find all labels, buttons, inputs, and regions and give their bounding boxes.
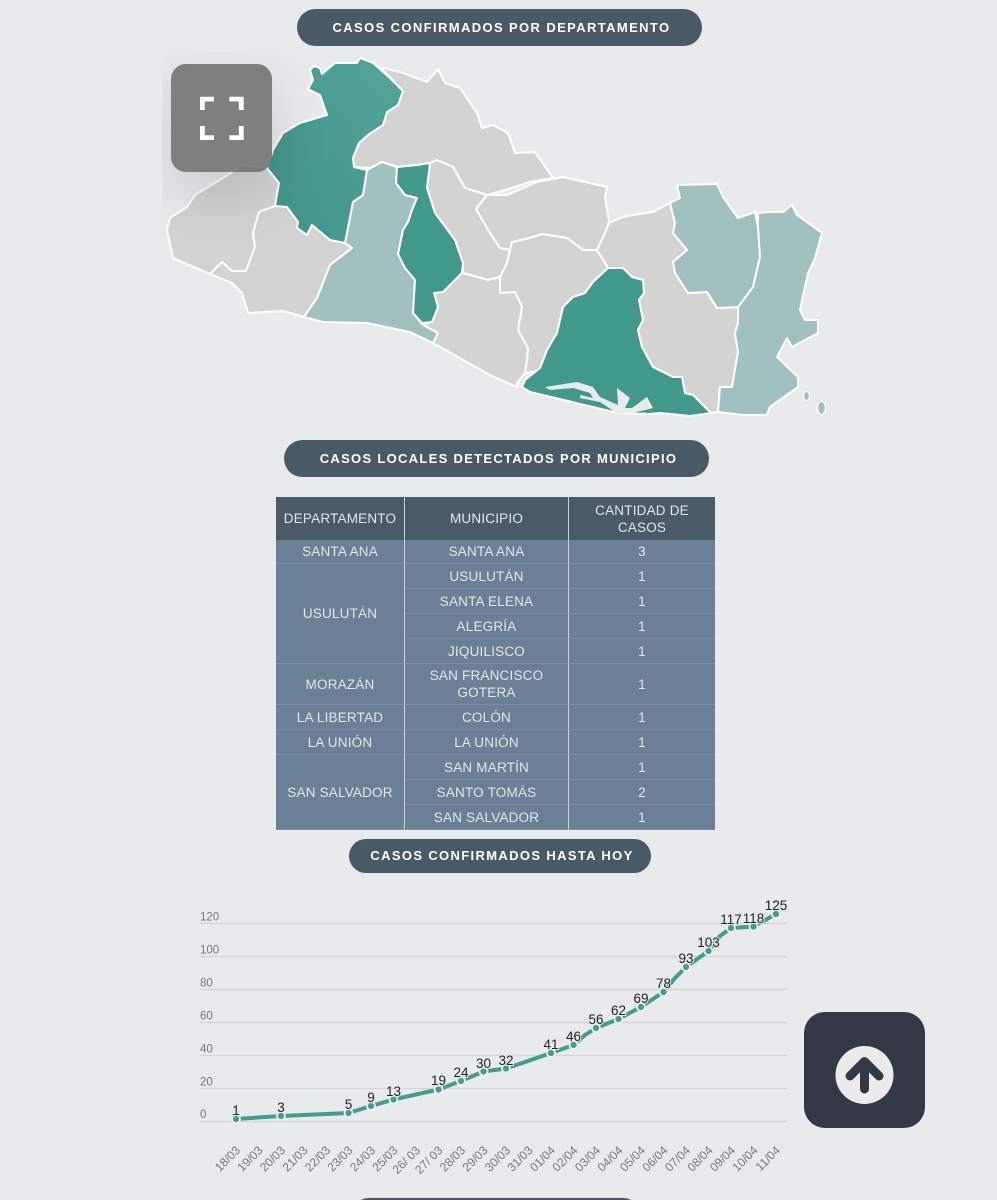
- line chart: casos acumulados: [200, 898, 787, 1177]
- table: casos por municipio: MORAZÁN: [306, 676, 374, 692]
- y axis labels: 40: [200, 1044, 213, 1056]
- x axis labels: 24/03: [347, 1143, 378, 1174]
- y axis labels: 0: [200, 1109, 206, 1121]
- table: casos por municipio: ALEGRÍA: [457, 618, 516, 634]
- table: casos por municipio: 1: [638, 644, 646, 658]
- x axis labels: 10/04: [729, 1143, 761, 1174]
- x axis labels: 08/04: [684, 1143, 716, 1174]
- department: Santa Ana: [267, 58, 403, 243]
- data labels: 118: [743, 911, 764, 926]
- data labels: 93: [678, 951, 694, 966]
- x axis labels: 27/ 03: [412, 1143, 446, 1177]
- fullscreen button with shadow: [162, 64, 290, 210]
- data labels: 69: [633, 991, 649, 1006]
- department: San Vicente: [500, 234, 608, 387]
- data labels: 125: [765, 898, 787, 913]
- x axis labels: 26/ 03: [390, 1143, 423, 1177]
- data labels: 30: [476, 1056, 491, 1071]
- department: La Libertad: [304, 162, 438, 343]
- table: casos por municipio: 2: [638, 784, 646, 800]
- x axis labels: 22/03: [302, 1143, 333, 1174]
- data labels: 46: [566, 1029, 581, 1044]
- table: casos por municipio: LA UNIÓN: [454, 734, 519, 750]
- y axis labels: 100: [200, 944, 219, 956]
- heading: casos confirmados por departamento: [297, 9, 702, 46]
- x axis labels: 09/04: [707, 1143, 738, 1174]
- table: casos por municipio: DEPARTAMENTO: [284, 511, 396, 526]
- department: Morazan: [670, 184, 760, 308]
- data labels: 3: [277, 1100, 285, 1115]
- table: casos por municipio: 1: [638, 710, 646, 724]
- table: casos por municipio: LA UNIÓN: [308, 734, 372, 750]
- x axis labels: 07/04: [662, 1143, 693, 1174]
- table: casos por municipio: 1: [638, 568, 646, 584]
- x axis labels: 29/03: [459, 1143, 491, 1174]
- department: La Union: [718, 205, 822, 415]
- data labels: 117: [720, 912, 742, 927]
- table: casos por municipio: 1: [638, 734, 646, 750]
- table: casos por municipio: USULUTÁN: [303, 606, 377, 621]
- department: Usulutan: [522, 268, 711, 416]
- data labels: 41: [543, 1037, 559, 1052]
- islands: [804, 392, 826, 414]
- data labels: 103: [697, 935, 720, 950]
- x axis labels: 18/03: [212, 1143, 243, 1174]
- table: casos por municipio: GOTERA: [457, 685, 516, 700]
- data labels: 13: [386, 1084, 401, 1099]
- table: casos por municipio: USULUTÁN: [449, 568, 524, 584]
- department: Sonsonate: [210, 206, 352, 317]
- department: San Miguel: [597, 203, 738, 413]
- table: casos por municipio: 1: [638, 810, 646, 824]
- x axis labels: 05/04: [617, 1143, 648, 1174]
- table: casos por municipio: 1: [638, 676, 646, 692]
- data labels: 9: [367, 1090, 375, 1105]
- table: casos por municipio: CASOS: [618, 520, 666, 534]
- data points: [232, 910, 780, 1123]
- x axis labels: 25/03: [369, 1143, 401, 1174]
- data labels: 56: [588, 1012, 604, 1027]
- department: Chalatenango: [353, 67, 553, 195]
- icon: up arrow in circle: [836, 1046, 894, 1104]
- department: Ahuachapan: [167, 165, 279, 274]
- table: casos por municipio: 1: [638, 760, 646, 774]
- table: casos por municipio: SAN FRANCISCO: [430, 668, 543, 683]
- data labels: 78: [656, 976, 671, 991]
- x axis labels: 28/03: [437, 1143, 468, 1174]
- x axis labels: 02/04: [549, 1143, 581, 1174]
- x axis labels: 11/04: [753, 1143, 783, 1174]
- y axis labels: 120: [200, 912, 219, 924]
- table: casos por municipio: MUNICIPIO: [450, 511, 523, 526]
- table: casos por municipio: CANTIDAD DE: [595, 502, 689, 518]
- x axis labels: 23/03: [324, 1143, 356, 1174]
- table: casos por municipio: SAN MARTÍN: [444, 760, 529, 774]
- department: Cuscatlan: [427, 160, 510, 280]
- table: casos por municipio: SANTA ANA: [302, 544, 378, 559]
- heading: casos locales detectados por municipio: CASOS LOCALES DETECTADOS POR MUNICIPIO: [320, 451, 677, 466]
- heading: casos confirmados hasta hoy: CASOS CONFIRMADOS HASTA HOY: [370, 848, 634, 863]
- table: casos por municipio: COLÓN: [462, 710, 511, 724]
- table: casos por municipio: SAN SALVADOR: [434, 810, 539, 824]
- table: casos por municipio: 1: [638, 618, 646, 634]
- heading: casos confirmados hasta hoy: [349, 839, 651, 873]
- back to top button: [804, 1012, 925, 1128]
- data labels: 62: [611, 1003, 626, 1018]
- table: casos por municipio: JIQUILISCO: [448, 644, 525, 658]
- table: casos por municipio: SANTA ELENA: [440, 594, 533, 608]
- x axis labels: 01/04: [527, 1143, 558, 1174]
- data labels: 32: [498, 1053, 514, 1068]
- table: casos por municipio: LA LIBERTAD: [297, 710, 383, 724]
- x axis labels: 31/03: [504, 1143, 536, 1174]
- x axis labels: 03/04: [572, 1143, 603, 1174]
- table: casos por municipio: 1: [638, 594, 646, 608]
- department: La Paz: [423, 273, 528, 387]
- heading: casos confirmados por departamento: CASOS CONFIRMADOS POR DEPARTAMENTO: [332, 20, 670, 35]
- y axis labels: 80: [200, 978, 213, 990]
- x axis labels: [212, 1143, 783, 1177]
- heading: next section pill, cut off at page bottom: [352, 1197, 640, 1200]
- department: San Salvador: [396, 163, 463, 323]
- data labels: 24: [453, 1065, 469, 1080]
- heading: casos locales detectados por municipio: [284, 440, 709, 477]
- data labels: 1: [232, 1103, 240, 1118]
- data line: [236, 914, 776, 1119]
- icon: fullscreen corners: [200, 96, 244, 140]
- y axis labels: 60: [200, 1010, 213, 1022]
- data labels: 19: [431, 1073, 446, 1088]
- x axis labels: 19/03: [234, 1143, 266, 1174]
- table: casos por municipio: SAN SALVADOR: [287, 784, 393, 800]
- y axis labels: 20: [200, 1076, 213, 1088]
- table: casos por municipio: [276, 497, 715, 830]
- department: Cabanas: [476, 177, 609, 250]
- data labels: [232, 898, 787, 1118]
- table: casos por municipio: SANTO TOMÁS: [437, 784, 536, 800]
- x axis labels: 04/04: [594, 1143, 626, 1174]
- x axis labels: 21/03: [279, 1143, 311, 1174]
- bay of Jiquilisco: [545, 382, 653, 414]
- y axis labels: [200, 912, 219, 1121]
- table: casos por municipio: 3: [638, 544, 646, 559]
- map of departments: [166, 57, 826, 417]
- x axis labels: 30/03: [482, 1143, 513, 1174]
- table: casos por municipio: SANTA ANA: [449, 544, 524, 559]
- data labels: 5: [345, 1097, 352, 1112]
- x axis labels: 06/04: [639, 1143, 671, 1174]
- x axis labels: 20/03: [257, 1143, 288, 1174]
